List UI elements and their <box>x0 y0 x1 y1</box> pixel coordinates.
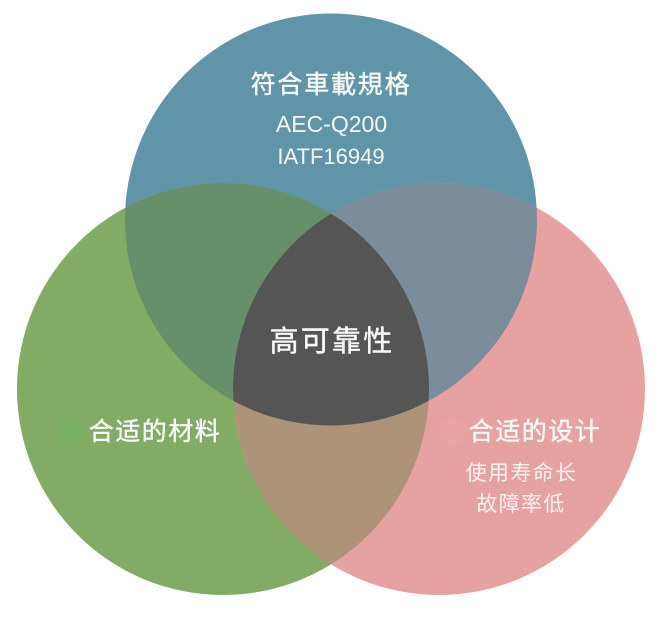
circle: left green <box>17 183 429 595</box>
text: AEC-Q200: AEC-Q200 <box>276 111 387 137</box>
icon: green dot <box>56 419 82 445</box>
text: IATF16949: IATF16949 <box>277 144 385 169</box>
text: low failure rate: 故障率低 <box>476 493 566 516</box>
heading: suitable design: 合适的设计 <box>469 418 601 446</box>
overlap: center <box>233 214 429 426</box>
overlap: top and left <box>125 183 331 401</box>
heading: suitable materials: 合适的材料 <box>89 418 221 446</box>
icon: pink dot <box>439 419 465 445</box>
circle: top blue <box>125 14 537 426</box>
text: long service life: 使用寿命长 <box>466 462 577 485</box>
circle: right pink <box>233 183 645 595</box>
heading: high reliability: 高可靠性 <box>270 325 394 358</box>
heading: automotive spec: 符合車載規格 <box>251 71 411 99</box>
overlap: left and right <box>233 214 429 564</box>
overlap: top and right <box>331 183 537 401</box>
